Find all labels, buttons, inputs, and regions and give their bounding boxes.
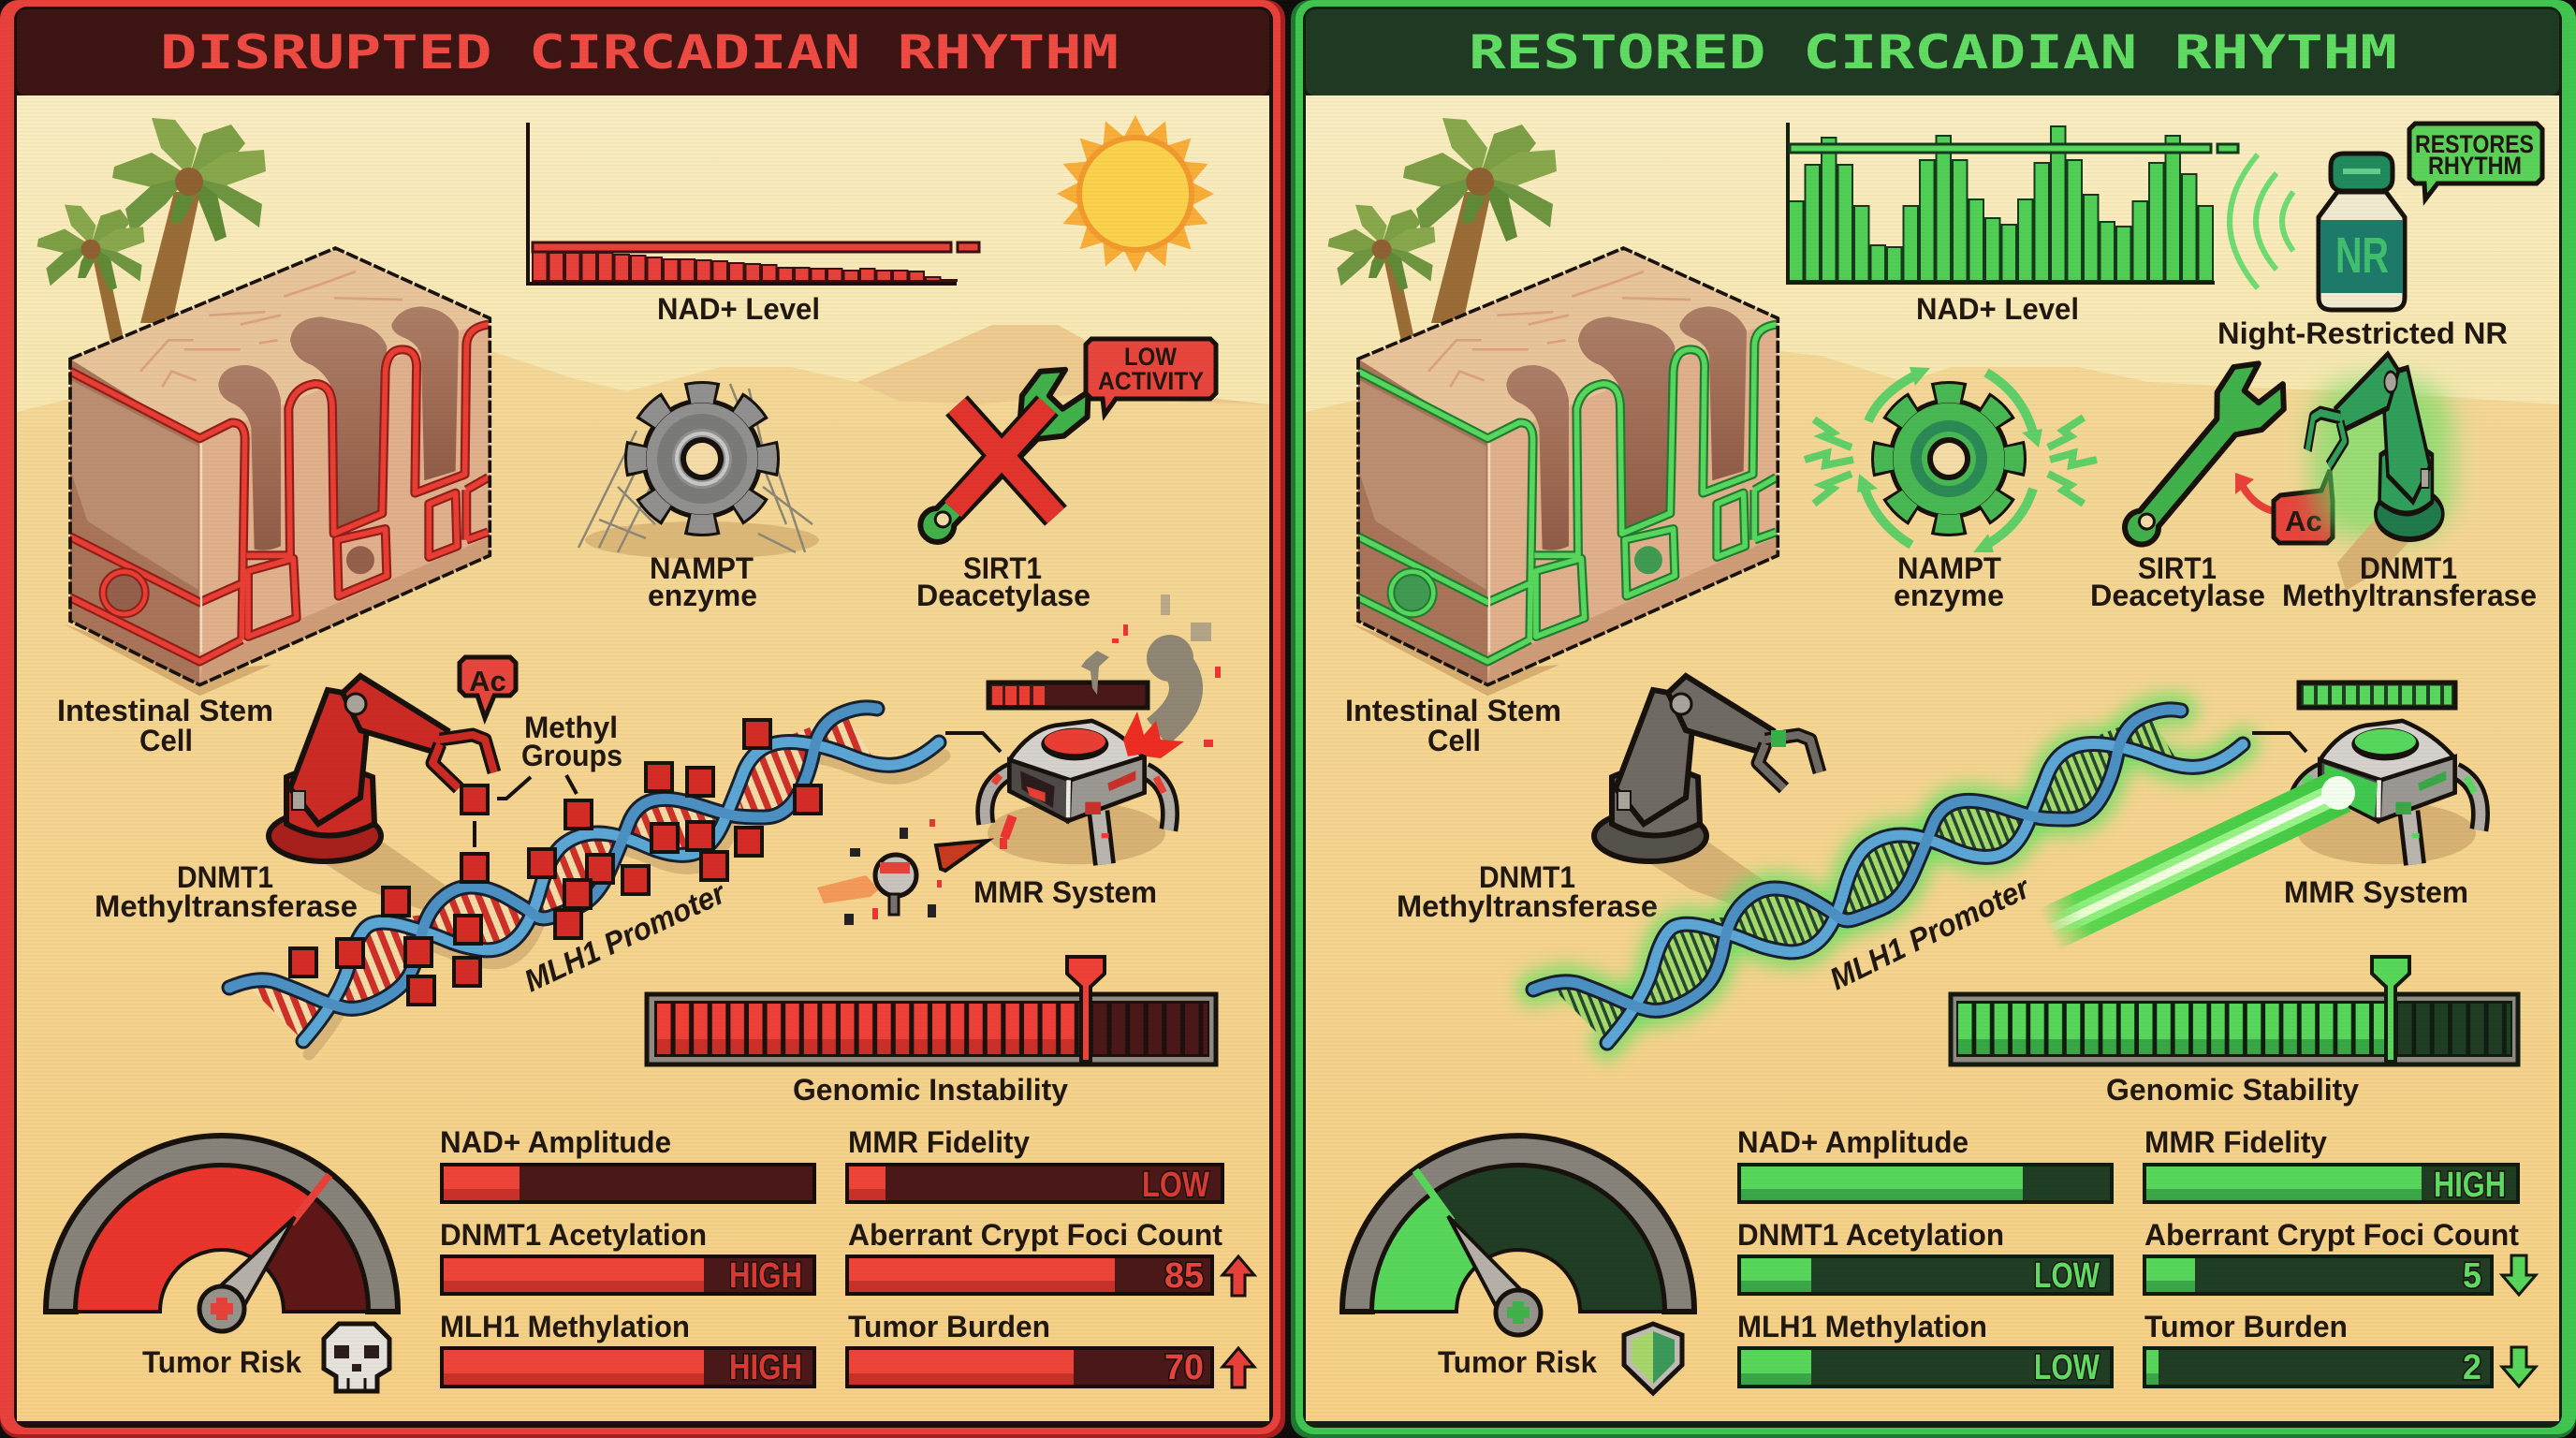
stat: DNMT1 acetylation: DNMT1 Acetylation [1737, 1218, 2004, 1252]
label: MMR system: MMR System [2284, 875, 2468, 909]
smoke and sparks [1000, 594, 1221, 849]
label: NAMPT enzyme [1894, 551, 2004, 612]
callout: restores rhythm [2409, 124, 2542, 199]
callout: Ac tag: Ac [469, 665, 506, 697]
callout: restores rhythm: RESTORES [2415, 130, 2534, 158]
stat: tumor burden: 70 [1164, 1348, 1204, 1387]
stat: MMR fidelity: MMR Fidelity [2144, 1125, 2327, 1159]
chart: NAD+ level, flat: NAD+ Level [657, 292, 820, 326]
stat: DNMT1 acetylation: DNMT1 Acetylation [440, 1218, 707, 1252]
stat: NAD+ amplitude: NAD+ Amplitude [1737, 1125, 1969, 1159]
stat: aberrant crypt foci count [2143, 1218, 2536, 1296]
label: MLH1 promoter: MLH1 Promoter [1824, 869, 2036, 996]
icon: Ac transfer arrow: Ac [2285, 505, 2322, 537]
stat: aberrant crypt foci count: Aberrant Crypt Foci Count [2144, 1218, 2519, 1252]
label: DNMT1 methyltransferase: DNMT1 [2360, 551, 2457, 585]
stat: MMR fidelity [845, 1125, 1224, 1205]
stat: MMR fidelity: LOW [1142, 1166, 1209, 1205]
icon: SIRT1 wrench [2106, 353, 2296, 562]
icon: skull [324, 1324, 389, 1391]
label: NAMPT enzyme: NAMPT [650, 551, 754, 585]
callout: low activity: ACTIVITY [1098, 367, 1204, 395]
icon: intestinal tissue block [64, 248, 490, 696]
label: intestinal stem cell: Intestinal Stem [57, 694, 273, 727]
icon: NR bottle [2319, 154, 2405, 310]
label: night-restricted NR: Night-Restricted NR [2217, 316, 2508, 350]
callout: restores rhythm: RHYTHM [2428, 152, 2522, 180]
meter: genomic stability [1951, 957, 2518, 1107]
stat: tumor burden [2143, 1310, 2536, 1388]
callout: low activity [1086, 339, 1216, 415]
label: SIRT1 deacetylase [916, 551, 1090, 612]
stat: MLH1 methylation: HIGH [729, 1348, 802, 1387]
label: intestinal stem cell [57, 694, 273, 757]
icon: palm trees [1328, 118, 1557, 342]
stat: aberrant crypt foci count [845, 1218, 1254, 1296]
stat: MMR fidelity: HIGH [2434, 1166, 2506, 1205]
methyl group squares [290, 720, 821, 1005]
gauge: tumor risk, low [1342, 1136, 1694, 1335]
label: methyl groups [475, 711, 622, 847]
debris: broken fragments [817, 819, 988, 925]
icon: intestinal tissue block, healthy [1352, 248, 1778, 696]
stat: tumor burden: Tumor Burden [848, 1310, 1050, 1343]
label: intestinal stem cell: Cell [139, 724, 193, 757]
label: MMR system: MMR System [973, 875, 1157, 909]
meter: genomic stability: Genomic Stability [2106, 1073, 2359, 1107]
header band [17, 9, 1269, 95]
label: DNMT1 methyltransferase: Methyltransferase [2282, 579, 2537, 612]
stat: MLH1 methylation: LOW [2034, 1348, 2100, 1387]
stat: DNMT1 acetylation: LOW [2034, 1256, 2100, 1296]
icon: NAMPT gear with cobwebs [578, 382, 819, 559]
title: RESTORED CIRCADIAN RHYTHM [1469, 25, 2397, 80]
icon: shield [1624, 1324, 1682, 1393]
label: DNMT1 methyltransferase lower: Methyltransferase [1397, 889, 1658, 923]
meter: genomic instability [647, 957, 1216, 1107]
icon: Ac transfer arrow [2235, 470, 2333, 543]
label: DNMT1 methyltransferase [95, 860, 358, 923]
stat: MMR fidelity [2143, 1125, 2520, 1205]
beam: repair laser [2048, 776, 2355, 930]
stat: DNMT1 acetylation [1737, 1218, 2114, 1296]
label: intestinal stem cell: Cell [1427, 724, 1481, 757]
stat: MLH1 methylation [1737, 1310, 2114, 1388]
icon: palm trees [37, 118, 266, 342]
label: DNMT1 methyltransferase lower: DNMT1 [1479, 860, 1575, 894]
DNA helix: MLH1 promoter, clean and glowing [1533, 710, 2243, 1043]
icon: NR bottle: NR [2335, 227, 2389, 284]
stat: NAD+ amplitude [440, 1125, 816, 1204]
icon: NAMPT gear, active [1805, 367, 2097, 552]
icon: DNMT1 robot arm, inhibited glow [2307, 354, 2452, 591]
gauge: tumor risk, high [46, 1136, 398, 1331]
label: SIRT1 deacetylase: SIRT1 [2138, 551, 2217, 585]
callout: low activity: LOW [1124, 343, 1177, 371]
stat: aberrant crypt foci count: Aberrant Crypt Foci Count [848, 1218, 1222, 1252]
chart: NAD+ level, rhythmic: NAD+ Level [1916, 292, 2079, 326]
header band [1306, 9, 2559, 95]
icon: MMR robot, repaired [2048, 682, 2481, 930]
icon: MMR robot, damaged [817, 594, 1221, 925]
label: SIRT1 deacetylase: Deacetylase [916, 579, 1090, 612]
icon: sun [1057, 115, 1214, 272]
stat: MLH1 methylation: MLH1 Methylation [1737, 1310, 1987, 1343]
label: MLH1 promoter: MLH1 Promoter [519, 874, 732, 998]
panel: restored circadian rhythm [1291, 0, 2576, 1438]
label: DNMT1 methyltransferase lower [1397, 860, 1658, 923]
label: DNMT1 methyltransferase: Methyltransferase [95, 889, 358, 923]
callout: Ac tag [460, 657, 516, 718]
label: NAMPT enzyme [648, 551, 757, 612]
label: methyl groups: Groups [521, 739, 622, 772]
label: SIRT1 deacetylase: Deacetylase [2090, 579, 2265, 612]
label: intestinal stem cell [1345, 694, 1561, 757]
status bar: full [2299, 682, 2455, 708]
label: NAMPT enzyme: enzyme [648, 579, 757, 612]
status bar: low [988, 682, 1148, 708]
chart: NAD+ level, rhythmic [1788, 123, 2238, 326]
chart: NAD+ level, flat [528, 123, 979, 326]
stat: tumor burden: 2 [2463, 1348, 2481, 1387]
label: intestinal stem cell: Intestinal Stem [1345, 694, 1561, 727]
label: tumor risk: Tumor Risk [1438, 1345, 1597, 1379]
stat: MMR fidelity: MMR Fidelity [848, 1125, 1030, 1159]
stat: NAD+ amplitude [1737, 1125, 2114, 1204]
stat: aberrant crypt foci count: 5 [2463, 1256, 2481, 1296]
stat: tumor burden [845, 1310, 1254, 1388]
title: DISRUPTED CIRCADIAN RHYTHM [160, 25, 1119, 80]
label: SIRT1 deacetylase: SIRT1 [963, 551, 1042, 585]
label: DNMT1 methyltransferase [2282, 551, 2537, 612]
stat: NAD+ amplitude: NAD+ Amplitude [440, 1125, 671, 1159]
label: NAMPT enzyme: NAMPT [1897, 551, 2001, 585]
stat: MLH1 methylation: MLH1 Methylation [440, 1310, 690, 1343]
DNA helix: MLH1 promoter, methylated [229, 708, 944, 1054]
icon: DNMT1 robot arm, active [269, 676, 494, 913]
label: methyl groups: Methyl [524, 711, 618, 744]
stat: DNMT1 acetylation [440, 1218, 816, 1296]
icon: DNMT1 robot arm, idle [1594, 676, 1820, 913]
meter: genomic instability: Genomic Instability [793, 1073, 1068, 1107]
label: tumor risk: Tumor Risk [142, 1345, 301, 1379]
label: NAMPT enzyme: enzyme [1894, 579, 2004, 612]
label: DNMT1 methyltransferase: DNMT1 [177, 860, 273, 894]
stat: MLH1 methylation [440, 1310, 816, 1388]
icon: SIRT1 wrench crossed out [902, 358, 1100, 560]
stat: DNMT1 acetylation: HIGH [729, 1256, 802, 1296]
stat: tumor burden: Tumor Burden [2144, 1310, 2348, 1343]
panel: disrupted circadian rhythm [0, 0, 1285, 1438]
label: SIRT1 deacetylase [2090, 551, 2265, 612]
icon: radiating waves [2230, 154, 2293, 288]
stat: aberrant crypt foci count: 85 [1164, 1256, 1204, 1296]
